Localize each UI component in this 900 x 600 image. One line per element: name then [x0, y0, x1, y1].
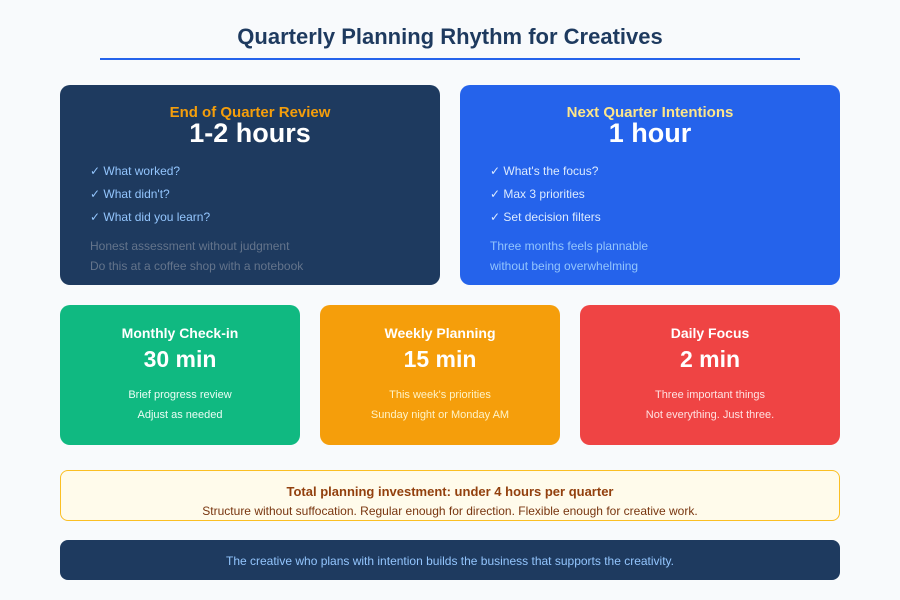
- notes: [646, 389, 774, 421]
- heading: Next Quarter Intentions: [567, 104, 733, 121]
- notes: [90, 239, 304, 273]
- panel: next quarter intentions: [460, 85, 840, 285]
- notes: without being overwhelming: [490, 259, 638, 273]
- panel: weekly planning: [320, 305, 560, 445]
- panel: daily focus: [580, 305, 840, 445]
- notes: Three important things: [655, 389, 765, 401]
- notes: Honest assessment without judgment: [90, 239, 289, 253]
- callout: total investment: [60, 470, 840, 521]
- duration: 1 hour: [609, 118, 691, 148]
- title: Quarterly Planning Rhythm for Creatives: [237, 24, 663, 49]
- checklist: ✓ Set decision filters: [490, 210, 601, 224]
- notes: Sunday night or Monday AM: [371, 409, 509, 421]
- heading: Monthly Check-in: [122, 325, 238, 341]
- notes: Three months feels plannable: [490, 239, 648, 253]
- title underline: [100, 58, 800, 60]
- checklist: [490, 164, 601, 224]
- panel: monthly check-in: [60, 305, 300, 445]
- callout heading: Total planning investment: under 4 hours per quarter: [287, 484, 613, 499]
- checklist: ✓ What did you learn?: [90, 210, 210, 224]
- notes: This week's priorities: [389, 389, 491, 401]
- heading: End of Quarter Review: [170, 104, 330, 121]
- notes: Adjust as needed: [137, 409, 222, 421]
- panel: end of quarter review: [60, 85, 440, 285]
- checklist: ✓ What didn't?: [90, 187, 170, 201]
- heading: Daily Focus: [671, 325, 749, 341]
- notes: Brief progress review: [128, 389, 232, 401]
- duration: 2 min: [680, 346, 740, 372]
- checklist: ✓ What's the focus?: [490, 164, 598, 178]
- checklist: ✓ Max 3 priorities: [490, 187, 585, 201]
- duration: 15 min: [404, 346, 476, 372]
- notes: Do this at a coffee shop with a notebook: [90, 259, 303, 273]
- notes: Not everything. Just three.: [646, 409, 774, 421]
- checklist: ✓ What worked?: [90, 164, 180, 178]
- duration: 30 min: [144, 346, 216, 372]
- notes: [490, 239, 648, 273]
- callout text: Structure without suffocation. Regular enough for direction. Flexible enough for creative work.: [202, 504, 698, 518]
- notes: [371, 389, 509, 421]
- footer text: The creative who plans with intention builds the business that supports the creativity.: [226, 554, 674, 568]
- duration: 1-2 hours: [189, 118, 311, 148]
- checklist: [90, 164, 210, 224]
- heading: Weekly Planning: [384, 325, 496, 341]
- footer banner: [60, 540, 840, 580]
- notes: [128, 389, 232, 421]
